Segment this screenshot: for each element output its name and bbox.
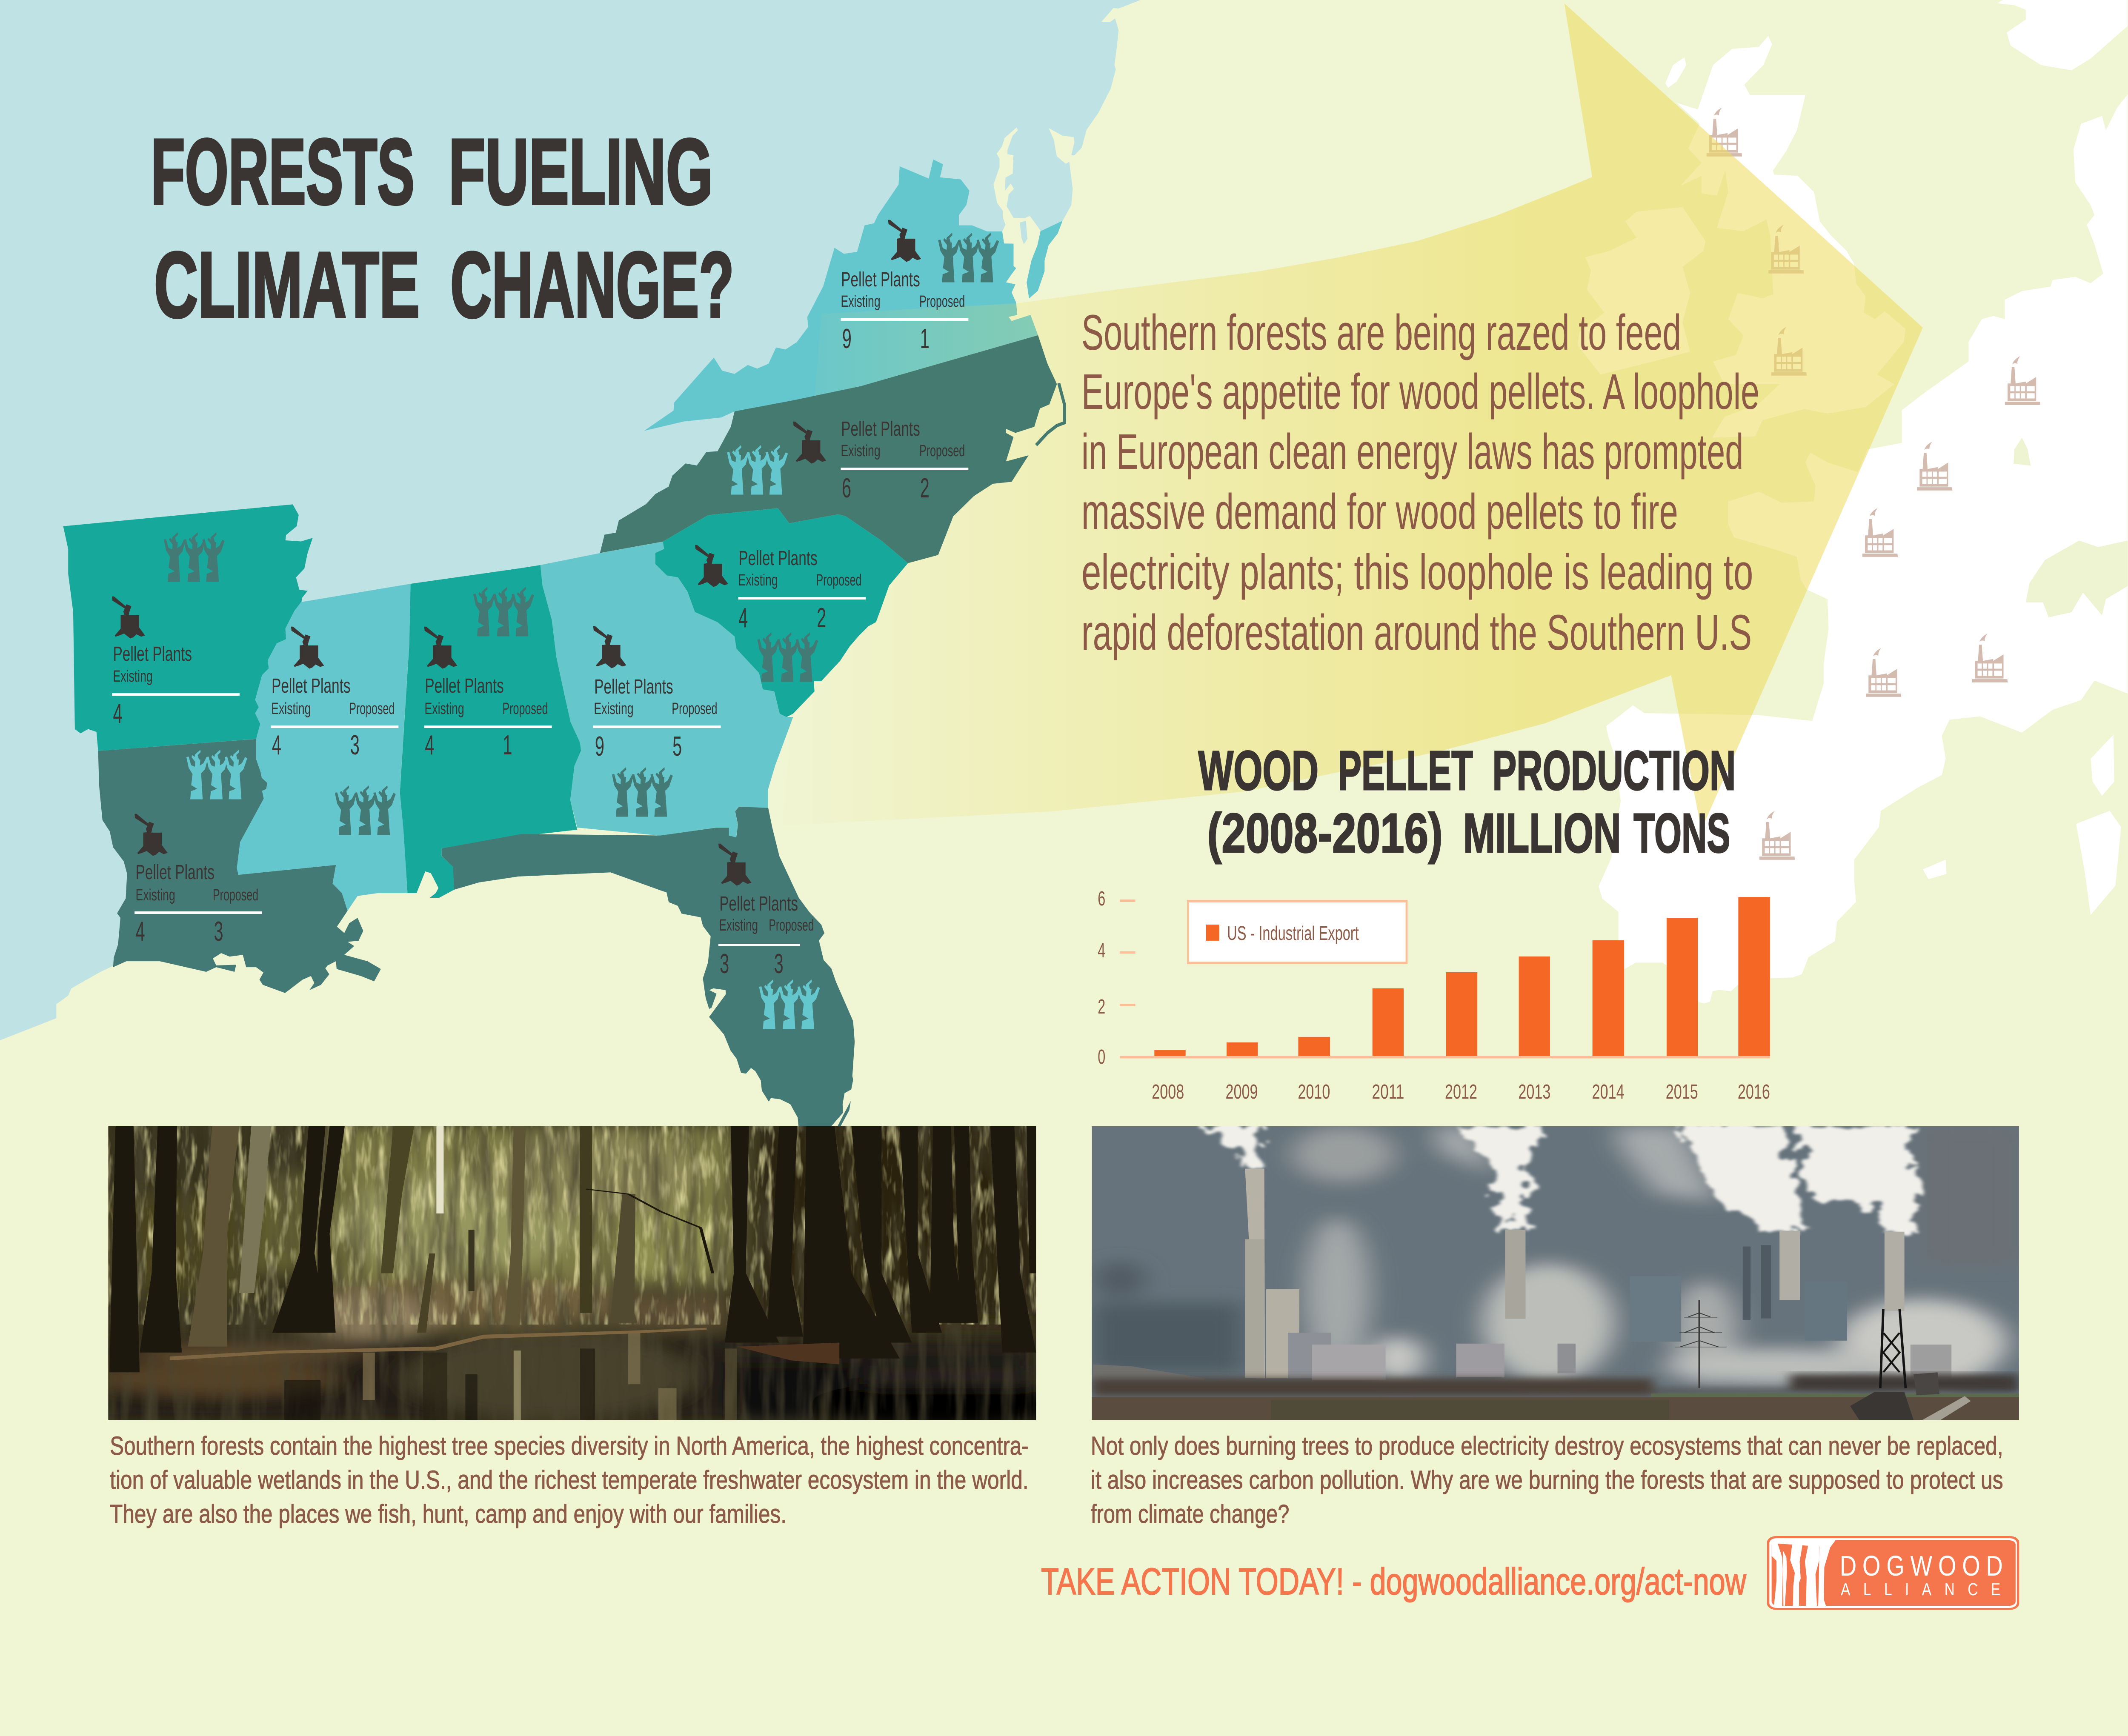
Outer Banks (1036, 383, 1064, 445)
y axis labels: 4 (1098, 939, 1105, 962)
x axis labels (1152, 1080, 1770, 1103)
state: Virginia (644, 160, 1038, 431)
panel: South Carolina data (695, 545, 866, 682)
y axis labels: 0 (1098, 1045, 1105, 1068)
column heading: Proposed (919, 293, 965, 311)
proposed count: 2 (920, 472, 930, 503)
text block: intro paragraph: rapid deforestation around the Southern U.S (1081, 604, 1752, 660)
state: Arkansas (63, 504, 313, 751)
x axis labels: 2010 (1298, 1080, 1330, 1103)
state: South Carolina (655, 508, 908, 717)
icon: factory (1707, 108, 1742, 157)
panel: Arkansas data (112, 532, 240, 729)
panel: Virginia data (841, 220, 999, 354)
column heading: Proposed (816, 571, 862, 589)
existing count: 4 (113, 698, 123, 729)
small northern island (1665, 57, 1686, 88)
icon: dead trees (186, 750, 247, 799)
proposed count: 3 (350, 729, 360, 760)
Baltic land patch (2026, 540, 2128, 617)
icon: factory (1768, 225, 1804, 274)
label: Pellet Plants (841, 417, 920, 440)
icon: factory (1771, 327, 1807, 376)
state: Louisiana (98, 739, 381, 993)
text block: intro paragraph: in European clean energy laws has prompted (1081, 423, 1743, 480)
y axis labels (1098, 887, 1105, 1068)
Florida Keys (838, 1101, 851, 1126)
column heading: Existing (136, 886, 175, 904)
x axis labels: 2015 (1666, 1080, 1698, 1103)
panel: Mississippi data (271, 627, 398, 835)
text block: intro paragraph: massive demand for wood pellets to fire (1081, 483, 1678, 540)
icon: dead trees (759, 979, 820, 1029)
icon: axe and stump (793, 422, 826, 463)
existing count: 4 (272, 729, 281, 760)
caption: forest text: They are also the places we fish, hunt, camp and enjoy with our families. (110, 1499, 787, 1528)
label: Pellet Plants (594, 675, 673, 698)
column heading: Proposed (769, 917, 814, 934)
existing count: 4 (425, 729, 434, 760)
y axis labels: 2 (1098, 995, 1105, 1018)
light foliage streaks (108, 1126, 1036, 1325)
x axis labels: 2012 (1445, 1080, 1477, 1103)
existing count: 9 (842, 323, 852, 354)
photo: power plant smokestacks (1092, 1126, 2019, 1420)
call to action: TAKE ACTION TODAY! - dogwoodalliance.org/act-now (1041, 1561, 1747, 1603)
panel: North Carolina data (727, 417, 968, 503)
icon: dead trees (473, 587, 534, 637)
label: Pellet Plants (425, 674, 504, 697)
label: Pellet Plants (272, 674, 351, 697)
panel: Florida data (718, 844, 820, 1029)
x axis labels: 2009 (1225, 1080, 1258, 1103)
icon: factory (1917, 442, 1952, 491)
icon: dead trees (757, 632, 818, 682)
column heading: Proposed (672, 700, 717, 718)
existing count: 4 (136, 916, 145, 947)
icon: dead trees (938, 233, 999, 283)
chart heading: (2008-2016) (1207, 802, 1443, 864)
caption: forest text: Southern forests contain the highest tree species diversity in North America, the highest concentra- (110, 1431, 1029, 1460)
icon: axe and stump (718, 844, 752, 885)
column heading: Existing (594, 700, 634, 718)
existing count: 6 (842, 472, 851, 503)
legend box (1187, 900, 1407, 964)
caption: power plant text: from climate change? (1091, 1499, 1289, 1528)
column heading: Existing (271, 700, 311, 718)
proposed count: 1 (920, 323, 930, 354)
label: Pellet Plants (136, 861, 215, 884)
Great Britain (1677, 36, 1905, 438)
state: Alabama (400, 565, 581, 898)
photo: swamp forest (97, 1126, 1075, 1428)
icon: factory (1866, 648, 1901, 697)
title: FUELING (449, 120, 713, 224)
proposed count: 1 (503, 729, 512, 760)
logo tagline: ALLIANCE (1841, 1579, 2000, 1599)
logo frame and trees (1767, 1536, 2019, 1610)
text block: intro paragraph (1081, 304, 1759, 660)
icon: factory (1972, 634, 2008, 682)
icon: dead trees (612, 767, 673, 817)
caption: power plant text: it also increases carbon pollution. Why are we burning the forests that are supposed to protect us (1091, 1465, 2003, 1494)
existing count: 4 (738, 602, 748, 633)
y axis labels: 6 (1098, 887, 1105, 910)
dark streaks (108, 1126, 1036, 1420)
x axis labels: 2014 (1592, 1080, 1625, 1103)
label: Pellet Plants (113, 642, 192, 665)
label: Pellet Plants (738, 547, 818, 570)
proposed count: 3 (214, 916, 223, 947)
x axis labels: 2008 (1152, 1080, 1184, 1103)
chart heading: TONS (1633, 802, 1730, 864)
caption: power plant text: Not only does burning trees to produce electricity destroy ecosystems that can never be replaced, (1091, 1431, 2003, 1460)
logo wordmark: DOGWOOD (1840, 1550, 2003, 1582)
column heading: Existing (113, 668, 153, 685)
column heading: Proposed (213, 886, 258, 904)
state: North Carolina (600, 335, 1064, 563)
icon: dead trees (164, 532, 225, 582)
proposed count: 5 (672, 731, 682, 762)
logo: Dogwood Alliance (1767, 1536, 2019, 1610)
chart heading (1198, 740, 1736, 864)
state: Georgia (541, 542, 793, 837)
icon: axe and stump (112, 597, 145, 638)
proposed count: 3 (774, 948, 784, 979)
x axis labels: 2013 (1518, 1080, 1550, 1103)
title: CLIMATE (154, 233, 420, 337)
icon: axe and stump (291, 627, 324, 668)
bar chart: wood pellet production (1098, 887, 1770, 1103)
column heading: Proposed (919, 442, 965, 460)
Virginia eastern shore (1027, 221, 1063, 299)
Europe map (1578, 0, 2128, 1004)
inland light blue area (0, 0, 1141, 1040)
export arrow to Europe (782, 3, 1923, 830)
state: Mississippi (237, 584, 411, 911)
icon: factory (2005, 356, 2040, 405)
title: FORESTS (151, 120, 415, 224)
Delmarva peninsula strip (993, 127, 1041, 303)
Ireland (1578, 207, 1705, 374)
text block: intro paragraph: Southern forests are being razed to feed (1081, 304, 1681, 360)
label: Pellet Plants (719, 892, 798, 915)
icon: axe and stump (134, 814, 168, 856)
column heading: Proposed (349, 700, 395, 718)
small land patch (2014, 438, 2031, 465)
caption: forest text (110, 1431, 1029, 1528)
column heading: Existing (719, 917, 758, 934)
chart heading: MILLION (1463, 802, 1621, 864)
mainland Europe (1599, 94, 2128, 1004)
Scandinavia (1997, 0, 2128, 70)
title (151, 120, 734, 337)
column heading: Existing (738, 571, 778, 589)
caption: power plant text (1091, 1431, 2003, 1528)
icon: axe and stump (593, 626, 626, 668)
panel: Louisiana data (134, 750, 262, 947)
chart axis and bars (1120, 897, 1770, 1058)
column heading: Proposed (503, 700, 548, 718)
icon: dead trees (335, 785, 396, 835)
label: Pellet Plants (841, 268, 920, 291)
x axis labels: 2011 (1372, 1080, 1404, 1103)
chart heading: PELLET (1338, 740, 1473, 802)
text block: intro paragraph: electricity plants; this loophole is leading to (1081, 544, 1753, 600)
proposed count: 2 (817, 602, 826, 633)
chart heading: WOOD (1198, 740, 1319, 802)
chart heading: PRODUCTION (1493, 740, 1736, 802)
column heading: Existing (841, 293, 881, 311)
caption: forest text: tion of valuable wetlands in the U.S., and the richest temperate freshwater ecosystem in the world. (110, 1465, 1029, 1494)
icon: axe and stump (888, 220, 921, 262)
column heading: Existing (425, 700, 464, 718)
column heading: Existing (841, 442, 881, 460)
icon: axe and stump (695, 545, 728, 587)
island shapes (1923, 735, 2121, 915)
existing count: 3 (720, 948, 729, 979)
factories across Europe (1707, 108, 2040, 860)
title: CHANGE? (450, 233, 734, 337)
panel: Alabama data (424, 587, 552, 760)
icon: axe and stump (424, 627, 457, 668)
legend label: US - Industrial Export (1227, 922, 1359, 944)
state: Florida (442, 807, 855, 1126)
text block: intro paragraph: Europe's appetite for wood pellets. A loophole (1081, 363, 1759, 420)
x axis labels: 2016 (1738, 1080, 1770, 1103)
icon: factory (1862, 508, 1898, 557)
panel: Georgia data (593, 626, 721, 817)
icon: factory (1759, 811, 1795, 860)
existing count: 9 (595, 731, 604, 762)
icon: dead trees (727, 445, 788, 495)
